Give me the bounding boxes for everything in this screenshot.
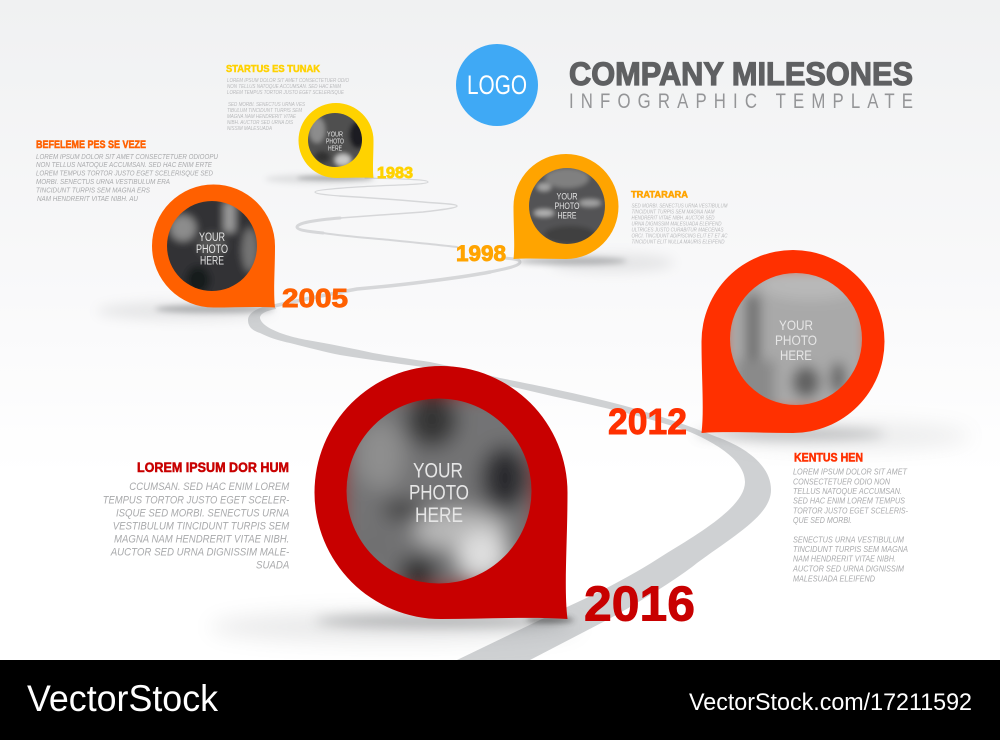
year: 1983 [377, 165, 413, 182]
description: NON TELLUS NATOQUE ACCUMSAN. SED HAC ENIM [227, 84, 342, 90]
footer bar [0, 660, 1000, 740]
description: LOREM IPSUM DOLOR SIT AMET CONSECTETUER ODIOOPU [36, 154, 219, 161]
pin [702, 250, 884, 433]
photo placeholder [308, 113, 362, 167]
photo placeholder [529, 168, 605, 244]
description: TEMPUS TORTOR JUSTO EGET SCELER- [103, 494, 290, 506]
photo caption: HERE [415, 504, 463, 527]
description: MALESUADA ELEIFEND [793, 573, 875, 583]
description: SED HAC ENIM LOREM TEMPUS [793, 496, 905, 506]
description: TINCIDUNT TURPIS SEM MAGNA [793, 544, 908, 554]
description: SED MORBI. SENECTUS URNA VESTIBULUM [632, 204, 728, 210]
description: URNA DIGNISSIM MALESUADA ELEIFEND [632, 222, 722, 228]
description: SED MORBI. SENECTUS URNA VES [228, 102, 305, 108]
description: AUCTOR SED URNA DIGNISSIM [792, 563, 905, 573]
description [227, 78, 349, 132]
heading: STARTUS ES TUNAK [226, 64, 321, 75]
year: 2005 [282, 283, 348, 313]
year: 2016 [584, 578, 695, 632]
description [632, 204, 728, 246]
title: COMPANY MILESONES [569, 56, 913, 92]
photo caption: PHOTO [326, 138, 344, 146]
subtitle: INFOGRAPHIC TEMPLATE [569, 90, 913, 114]
footer brand: VectorStock [27, 678, 218, 719]
description: NIBH. AUCTOR SED URNA DIS [227, 120, 293, 126]
description [103, 481, 290, 572]
description: MAGNA NAM HENDRERIT VITAE [227, 114, 296, 120]
photo caption: YOUR [327, 132, 343, 138]
photo placeholder [730, 273, 862, 405]
description: TINCIDUNT TURPIS SEM MAGNA ERS [36, 188, 150, 194]
photo caption: HERE [328, 146, 342, 152]
description: SENECTUS URNA VESTIBULUM [793, 534, 905, 544]
photo caption: HERE [780, 347, 812, 363]
milestone 1998 [456, 154, 728, 266]
milestone 2012 [608, 250, 908, 583]
heading: BEFELEME PES SE VEZE [36, 139, 146, 151]
photo caption [775, 317, 817, 363]
photo caption: PHOTO [196, 244, 228, 256]
description [36, 154, 219, 203]
description: VESTIBULUM TINCIDUNT TURPIS SEM [113, 520, 289, 532]
description: AUCTOR SED URNA DIGNISSIM MALE- [110, 546, 290, 558]
description: CONSECTETUER ODIO NON [793, 476, 891, 486]
description: NISSIM MALESUADA [227, 126, 272, 132]
description: MORBI. SENECTUS URNA VESTIBULUM ERA [36, 179, 170, 186]
description: ULTRICES JUSTO CURABITUR MAECENAS [632, 228, 724, 234]
description: TORTOR JUSTO EGET SCELERIS- [793, 505, 908, 515]
heading: KENTUS HEN [794, 450, 863, 464]
year: 2012 [608, 401, 687, 442]
description: HENDRERIT VITAE NIBH. AUCTOR SED [632, 216, 715, 222]
milestone 2005 [36, 139, 348, 313]
pin [152, 184, 275, 308]
photo caption [196, 232, 228, 268]
description: QUE SED MORBI. [793, 515, 852, 525]
heading: TRATARARA [631, 190, 688, 200]
milestone 2016 [103, 366, 695, 632]
photo placeholder [346, 398, 532, 584]
description: LOREM TEMPUS TORTOR JUSTO EGET SCELERISQUE SED [36, 170, 213, 178]
description: LOREM IPSUM DOLOR SIT AMET [793, 467, 908, 477]
photo caption: YOUR [413, 460, 463, 482]
photo caption: YOUR [199, 232, 225, 244]
description: NON TELLUS NATOQUE ACCUMSAN. SED HAC ENIM ERTE [36, 162, 212, 169]
photo caption [326, 132, 344, 152]
footer url: VectorStock.com/17211592 [689, 689, 972, 716]
description: TINCIDUNT ELIT NULLA MAURIS ELEIFEND [632, 240, 725, 246]
pin shadows [97, 174, 970, 643]
photo caption: PHOTO [409, 482, 469, 504]
pin [314, 366, 568, 619]
heading: LOREM IPSUM DOR HUM [137, 460, 289, 475]
photo placeholder [167, 201, 257, 291]
year: 1998 [456, 241, 506, 266]
description: LOREM IPSUM DOLOR SIT AMET CONSECTETUER ODIO [227, 78, 349, 84]
description: TINCIDUNT TURPIS SEM MAGNA NAM [632, 210, 715, 216]
description: LOREM TEMPUS TORTOR JUSTO EGET SCELERISQUE [227, 90, 344, 96]
description [792, 467, 908, 583]
description: ORCI. TINCIDUNT ADIPISCING ELIT ET ET AC [632, 234, 728, 240]
photo caption: PHOTO [554, 201, 580, 212]
pin [298, 103, 374, 178]
milestone 1983 [226, 64, 413, 182]
description: NAM HENDRERIT VITAE NIBH. AU [37, 196, 139, 203]
description: MAGNA NAM HENDRERIT VITAE NIBH. [114, 533, 289, 545]
logo [456, 44, 538, 126]
photo caption: YOUR [556, 192, 578, 202]
photo caption: HERE [558, 210, 576, 222]
winding road [248, 178, 771, 660]
photo caption: YOUR [779, 317, 813, 333]
photo caption [554, 192, 580, 222]
description: SUADA [256, 560, 289, 572]
description: NAM HENDRERIT VITAE NIBH. [793, 554, 896, 564]
description: CCUMSAN. SED HAC ENIM LOREM [129, 481, 289, 493]
photo caption: HERE [200, 256, 224, 268]
description: ISQUE SED MORBI. SENECTUS URNA [116, 507, 289, 519]
photo caption [409, 460, 469, 527]
photo caption: PHOTO [775, 332, 817, 348]
description: TIBULUM TINCIDUNT TURPIS SEM [227, 108, 303, 114]
pin [514, 154, 618, 259]
logo: LOGO [467, 70, 527, 100]
description: TELLUS NATOQUE ACCUMSAN. [793, 486, 902, 496]
